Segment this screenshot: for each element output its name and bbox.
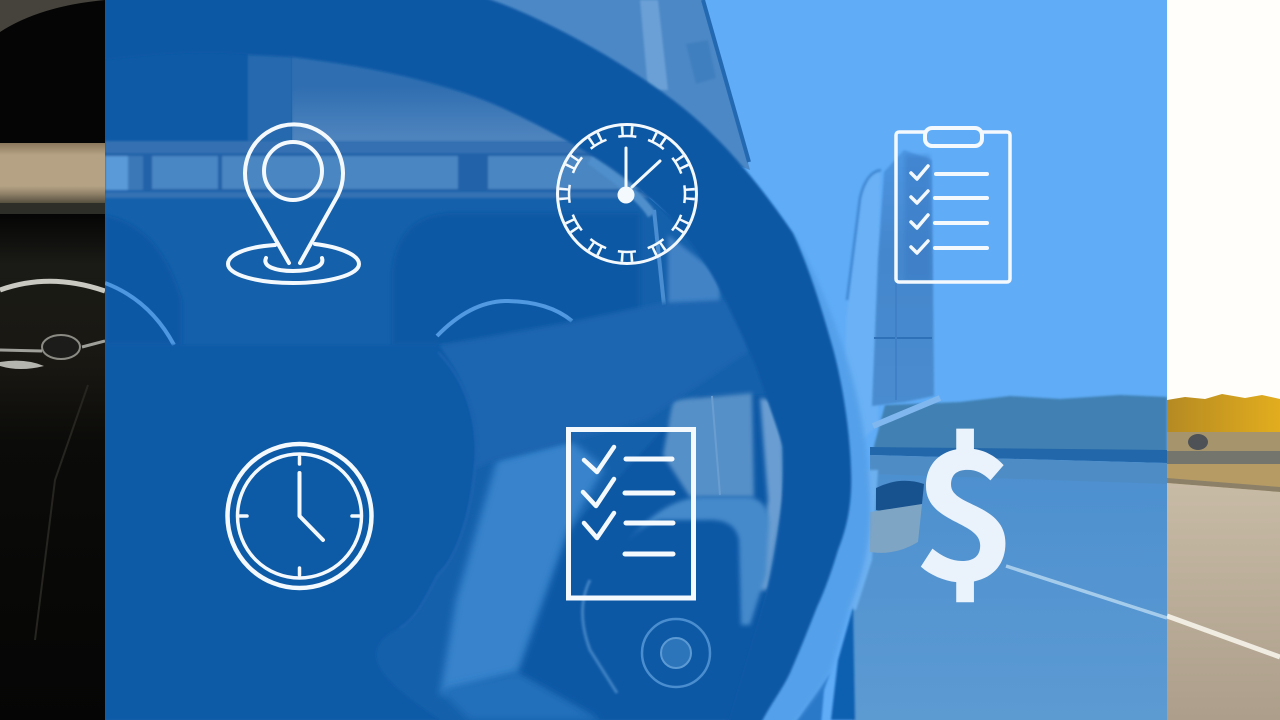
- icon: document checklist: [568, 430, 694, 598]
- lower door edge: [850, 469, 879, 610]
- left photo strip: dashboard: [0, 0, 105, 640]
- icon: location pin: [228, 124, 359, 283]
- lower wheel column: [448, 674, 593, 720]
- icon: ornate wall clock: [558, 124, 696, 264]
- treeline: [874, 395, 1167, 452]
- steering wheel hub pad: [105, 345, 476, 720]
- gauge arcs: [105, 283, 174, 345]
- centre console dark recess: [578, 394, 760, 720]
- road: [852, 474, 1167, 720]
- panel background: sky: [640, 0, 1167, 720]
- steering wheel soft outer band: [762, 256, 872, 720]
- inner pillar light: [590, 160, 652, 215]
- cab pillar: [470, 0, 750, 170]
- right photo strip: roadside: [1167, 0, 1280, 720]
- cable curve: [582, 580, 617, 693]
- icon: dollar sign: $: [912, 372, 1018, 632]
- console bezel: [625, 497, 769, 625]
- side mirror: [872, 150, 934, 406]
- icon: clipboard checklist: [896, 128, 1010, 282]
- upper dash cover: [292, 57, 568, 142]
- dash interior: [105, 54, 766, 720]
- side mirror arm: [846, 174, 879, 434]
- guard rail: [870, 447, 1167, 463]
- steering wheel rim: [246, 0, 852, 720]
- console light panel: [663, 393, 754, 497]
- spoke upper: [440, 299, 748, 470]
- icon: round clock: [228, 444, 372, 588]
- light patch on spoke: [440, 440, 604, 695]
- ignition knob: [642, 619, 710, 687]
- dash vent strip: [105, 141, 665, 198]
- instrument pods: [105, 215, 182, 345]
